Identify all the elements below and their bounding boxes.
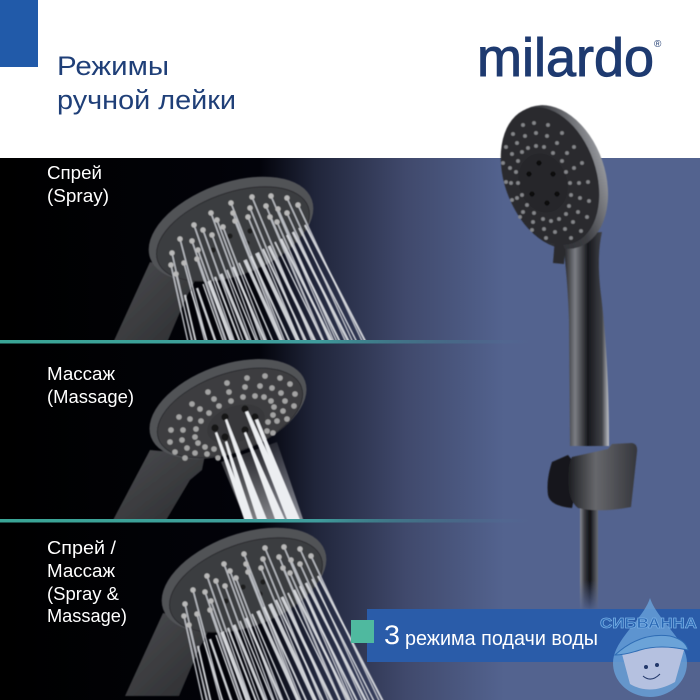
spray and massage label: Massage) (47, 605, 127, 626)
blue corner block (0, 0, 38, 67)
callout text: режима подачи воды (405, 627, 598, 650)
massage label: (Massage) (47, 386, 134, 407)
spray and massage label: (Spray & (47, 583, 120, 604)
product: hand shower with holder (483, 91, 637, 609)
massage label (47, 363, 134, 407)
spray shower head (114, 176, 366, 340)
callout bar (367, 609, 700, 662)
logo: milardo: ® (654, 39, 662, 50)
spray and massage label (47, 537, 127, 626)
shower head front (483, 91, 626, 264)
teal square marker (351, 620, 374, 643)
divider line 2 (0, 519, 530, 522)
logo: milardo: milardo (477, 28, 654, 88)
title (57, 51, 236, 115)
wall holder (548, 443, 637, 510)
massage label: Массаж (47, 363, 116, 384)
hose (580, 505, 598, 609)
callout: 3 water modes (351, 609, 700, 662)
spray and massage label: Массаж (47, 560, 116, 581)
title: Режимы (57, 51, 169, 81)
callout text (384, 620, 598, 650)
spray label (47, 162, 109, 206)
spray label: (Spray) (47, 185, 109, 206)
title: ручной лейки (57, 85, 236, 115)
spray label: Спрей (47, 162, 102, 183)
panel: spray and massage mode (48, 527, 384, 700)
spray and massage label: Спрей / (47, 537, 117, 558)
callout text: 3 (384, 620, 400, 650)
watermark: sibvanna bath drop (600, 598, 697, 697)
handle (562, 232, 609, 446)
watermark: sibvanna bath drop: СИБВАННА (600, 615, 697, 632)
combined shower head (124, 527, 384, 700)
massage shower head (113, 358, 307, 519)
divider line 1 (0, 340, 530, 344)
panel: massage mode (48, 358, 307, 519)
panel: spray mode (48, 165, 366, 340)
dark to blue gradient band (0, 158, 700, 700)
